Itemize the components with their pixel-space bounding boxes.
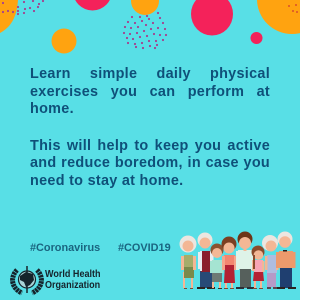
person: girl	[252, 246, 264, 289]
person: boy	[210, 244, 224, 289]
person: grandfather left	[197, 232, 215, 289]
dots: center cluster	[123, 12, 167, 49]
text: second paragraph: need to stay at home.	[30, 173, 183, 189]
text: first paragraph: exercises you can perform at	[30, 84, 270, 100]
person: grandmother left	[180, 236, 196, 289]
hashtag: COVID19: #COVID19	[118, 242, 171, 254]
circle: top red	[73, 0, 112, 10]
logo text: World Health Organization: World Health	[45, 268, 101, 280]
logo text: World Health Organization	[45, 268, 101, 291]
circle: orange	[52, 28, 76, 54]
logo text: World Health Organization: Organization	[45, 279, 100, 291]
text: first paragraph: home.	[30, 101, 74, 117]
text: second paragraph	[30, 138, 270, 189]
text: first paragraph	[30, 66, 270, 117]
person: grandfather right	[276, 232, 296, 289]
hashtag: Coronavirus: #Coronavirus	[30, 242, 100, 254]
circle: small red	[250, 32, 262, 44]
person: grandmother right	[262, 235, 278, 289]
person: mother	[222, 236, 237, 289]
circle: top orange	[131, 0, 159, 15]
text: first paragraph: Learn simple daily physical	[30, 66, 270, 82]
circle: large orange	[257, 0, 320, 34]
circle: large red	[191, 0, 233, 36]
text: second paragraph: and reduce boredom, in case you	[30, 155, 270, 171]
dots: left cluster	[2, 0, 44, 15]
person: father	[236, 232, 255, 289]
blob: top-left orange	[0, 0, 18, 33]
dots: on orange circle	[288, 4, 298, 13]
text: second paragraph: This will help to keep you active	[30, 138, 270, 154]
